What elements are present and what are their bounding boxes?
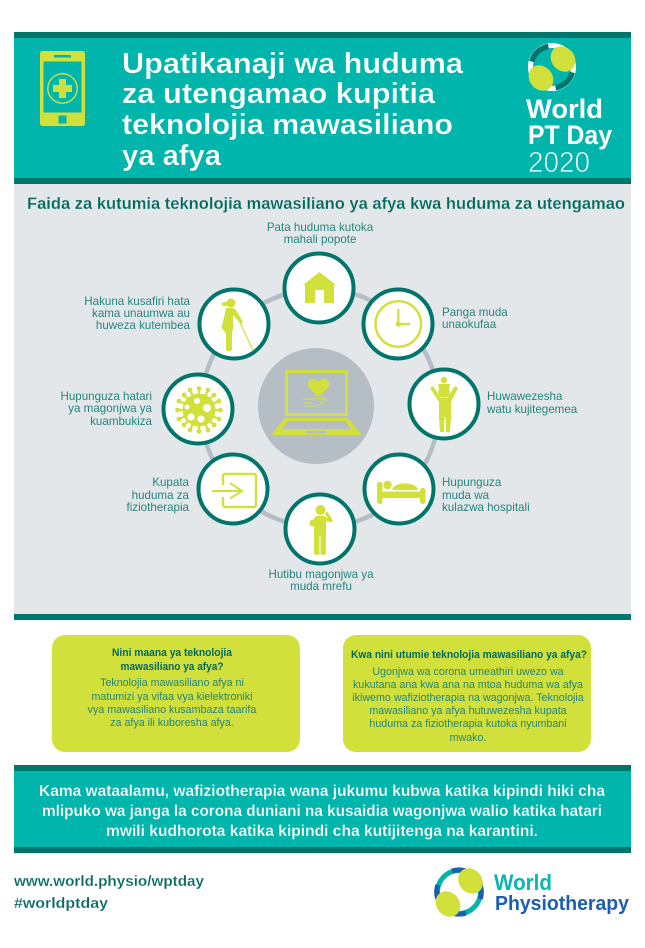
label: independence: watu kujitegemea	[486, 403, 578, 416]
card: what is telehealth: matumizi ya vifaa vya kielektroniki	[92, 691, 252, 703]
label: no travel: kama unaumwa au	[92, 307, 190, 320]
center: laptop with heart	[258, 348, 374, 464]
logo: World Physiotherapy: Physiotherapy	[495, 892, 630, 915]
label: hospital stay: muda wa	[442, 489, 490, 502]
label: infection risk	[60, 390, 153, 428]
card: why use telehealth: Kwa nini utumie teknolojia mawasiliano ya afya?	[351, 649, 587, 661]
title: ya afya	[122, 140, 222, 172]
label: infection risk: Hupunguza hatari	[60, 390, 152, 403]
card: why use telehealth: mwako.	[450, 732, 486, 744]
node: person with child on shoulders	[410, 370, 478, 438]
card: why use telehealth: ikiwemo wafiziotherapia na wagonjwa. Teknolojia	[352, 692, 584, 704]
node: virus	[164, 374, 232, 444]
label: schedule	[442, 306, 508, 331]
panel: closing message	[14, 765, 631, 853]
panel: header banner	[14, 32, 631, 184]
label: anywhere: Pata huduma kutoka	[267, 221, 374, 234]
card: why use telehealth: huduma za fiziotherapia kutoka nyumbani	[369, 718, 567, 730]
label: schedule: unaokufaa	[442, 318, 497, 331]
title	[122, 48, 464, 172]
label: chronic disease: Hutibu magonjwa ya	[268, 568, 374, 581]
title: za utengamao kupitia	[122, 78, 436, 110]
node: elderly person with cane	[200, 290, 268, 358]
icon: smartphone with medical cross	[40, 51, 85, 126]
card: what is telehealth: mawasiliano ya afya?	[120, 661, 224, 673]
logo: World PT Day 2020: World	[526, 94, 603, 124]
label: physiotherapy services: fiziotherapia	[126, 501, 190, 514]
label: hospital stay	[442, 476, 530, 514]
card: what is telehealth: Nini maana ya teknolojia	[112, 647, 233, 659]
card: why use telehealth: mawasiliano ya afya hutuwezesha kupata	[369, 705, 567, 717]
card: why use telehealth: kukutana ana kwa ana na mtoa huduma wa afya	[353, 679, 583, 691]
label: chronic disease: muda mrefu	[290, 580, 352, 593]
footer links	[13, 873, 205, 912]
label: hospital stay: kulazwa hospitali	[442, 501, 530, 514]
logo: World Physiotherapy	[431, 863, 630, 922]
logo: World PT Day 2020: PT Day	[528, 120, 612, 150]
card: what is telehealth: vya mawasiliano kusambaza taarifa	[88, 704, 256, 716]
panel: closing message: Kama wataalamu, wafiziotherapia wana jukumu kubwa katika kipindi hiki cha	[39, 783, 605, 800]
node: bed	[364, 454, 434, 524]
label: physiotherapy services: Kupata	[152, 476, 190, 489]
panel: benefits	[14, 184, 631, 620]
label: schedule: Panga muda	[442, 306, 508, 319]
logo: World PT Day 2020: 2020	[528, 147, 590, 179]
title: teknolojia mawasiliano	[122, 109, 453, 141]
label: no travel	[84, 295, 191, 332]
label: no travel: Hakuna kusafiri hata	[84, 295, 191, 308]
label: hospital stay: Hupunguza	[442, 476, 502, 489]
panel: closing message: mlipuko wa janga la corona duniani na kusaidia wagonjwa walio katika hatari	[42, 803, 602, 820]
label: infection risk: kuambukiza	[90, 415, 153, 428]
label: anywhere	[267, 221, 374, 246]
panel: closing message: mwili kudhorota katika kipindi cha kutijitenga na karantini.	[106, 823, 538, 840]
title: Upatikanaji wa huduma	[122, 48, 464, 80]
card: what is telehealth: za afya ili kuboresha afya.	[110, 717, 234, 729]
footer links: #worldptday	[14, 895, 109, 912]
heading: benefits: Faida za kutumia teknolojia mawasiliano ya afya kwa huduma za utengamao	[27, 194, 625, 213]
node: clock	[364, 290, 432, 358]
footer links: www.world.physio/wptday	[13, 873, 205, 890]
label: anywhere: mahali popote	[284, 233, 356, 246]
label: physiotherapy services: huduma za	[132, 489, 190, 502]
label: physiotherapy services	[126, 476, 190, 514]
logo: World Physiotherapy: World	[494, 870, 552, 895]
label: no travel: huweza kutembea	[96, 319, 191, 332]
node: sign-in arrow	[198, 454, 268, 524]
card: why use telehealth	[343, 635, 591, 752]
node: home	[284, 254, 354, 322]
label: infection risk: ya magonjwa ya	[68, 402, 153, 415]
card: what is telehealth	[52, 635, 300, 752]
card: why use telehealth: Ugonjwa wa corona umeathiri uwezo wa	[372, 666, 564, 678]
label: independence: Huwawezesha	[487, 390, 563, 403]
label: chronic disease	[268, 568, 374, 593]
logo: World PT Day 2020	[524, 41, 612, 179]
label: independence	[486, 390, 578, 416]
diagram ring	[201, 289, 439, 527]
node: person thinking	[286, 494, 354, 564]
card: what is telehealth: Teknolojia mawasiliano afya ni	[100, 677, 244, 689]
